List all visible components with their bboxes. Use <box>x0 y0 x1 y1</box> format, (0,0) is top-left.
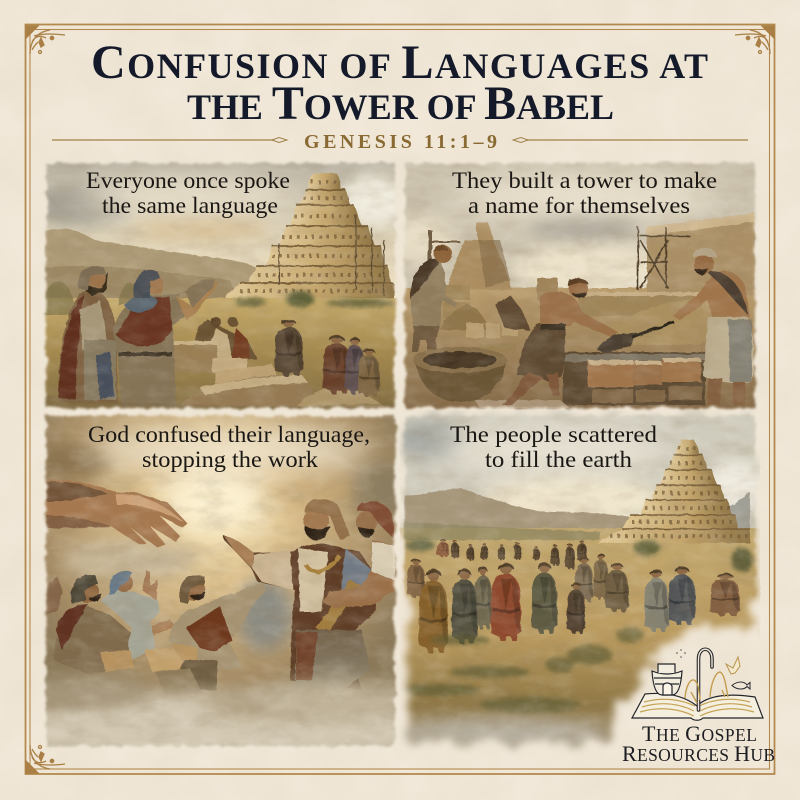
caption 3 <box>88 422 370 472</box>
caption 4: The people scattered <box>450 422 658 447</box>
logo: the gospel resources hub <box>622 649 775 766</box>
main pointing prophet <box>223 499 376 690</box>
icon: noah's ark <box>652 664 682 695</box>
distant crowd <box>437 539 587 569</box>
distant tower and buildings <box>428 222 558 300</box>
second man <box>322 502 395 608</box>
stone well <box>413 347 507 402</box>
caption 1 <box>86 168 290 218</box>
title: CONFUSION OF LANGUAGES AT <box>91 36 708 89</box>
tower <box>225 173 394 298</box>
icon: shepherd's staff <box>698 649 712 710</box>
rubble pile <box>631 300 706 346</box>
seated group <box>194 317 258 360</box>
panel 4: the people scattered <box>390 410 765 763</box>
panel 1: everyone once spoke the same language <box>30 160 410 415</box>
icon: fish <box>732 682 750 689</box>
panel 2: they built a tower to make a name <box>385 160 760 415</box>
divine hand <box>46 480 188 548</box>
stacked stones left <box>440 285 530 352</box>
caption 1: Everyone once spoke <box>86 168 290 193</box>
caption 2 <box>452 168 717 218</box>
logo text: RESOURCES HUB <box>622 741 775 766</box>
icon: sparkle <box>676 649 686 658</box>
scripture reference with rules <box>52 131 748 153</box>
walking families <box>407 553 740 653</box>
bricks <box>100 643 217 695</box>
logo text: THE GOSPEL <box>642 721 757 746</box>
logo text <box>622 721 775 766</box>
tower in distance <box>597 440 750 543</box>
standing onlookers <box>275 319 380 397</box>
caption 2: a name for themselves <box>468 193 690 218</box>
caption 3: stopping the work <box>142 447 319 472</box>
icon: open book <box>632 693 763 720</box>
man in red mantle <box>58 266 118 403</box>
scripture reference with rules: GENESIS 11:1–9 <box>304 131 497 153</box>
panel 3: god confused their language <box>42 412 400 749</box>
center worker with shovel <box>502 278 674 405</box>
caption 1: the same language <box>102 193 278 218</box>
pointing man with blue headcloth <box>113 270 218 407</box>
caption 4: to fill the earth <box>485 447 633 472</box>
left worker <box>411 245 458 354</box>
caption 3: God confused their language, <box>88 422 370 447</box>
shrubs on the plain <box>400 627 644 713</box>
painting: people walking away from the tower <box>390 410 765 763</box>
icon: shepherd figures <box>685 672 728 703</box>
central arguing figure <box>168 575 266 670</box>
cloud bank <box>44 668 398 750</box>
painting: tower on the plain with onlookers <box>30 160 410 415</box>
brick stack <box>475 352 705 408</box>
small figures on the left <box>46 570 175 675</box>
title: THE TOWER OF BABEL <box>187 77 614 130</box>
icon: dove <box>726 657 740 674</box>
right worker <box>673 247 754 405</box>
title <box>91 36 708 130</box>
caption 2: They built a tower to make <box>452 168 717 193</box>
painting: divine hand and arguing builders <box>42 412 400 749</box>
wall and scaffold <box>578 213 755 316</box>
caption 4 <box>450 422 658 472</box>
stone wall and slabs <box>172 341 386 407</box>
painting: workers building with bricks <box>385 160 760 415</box>
